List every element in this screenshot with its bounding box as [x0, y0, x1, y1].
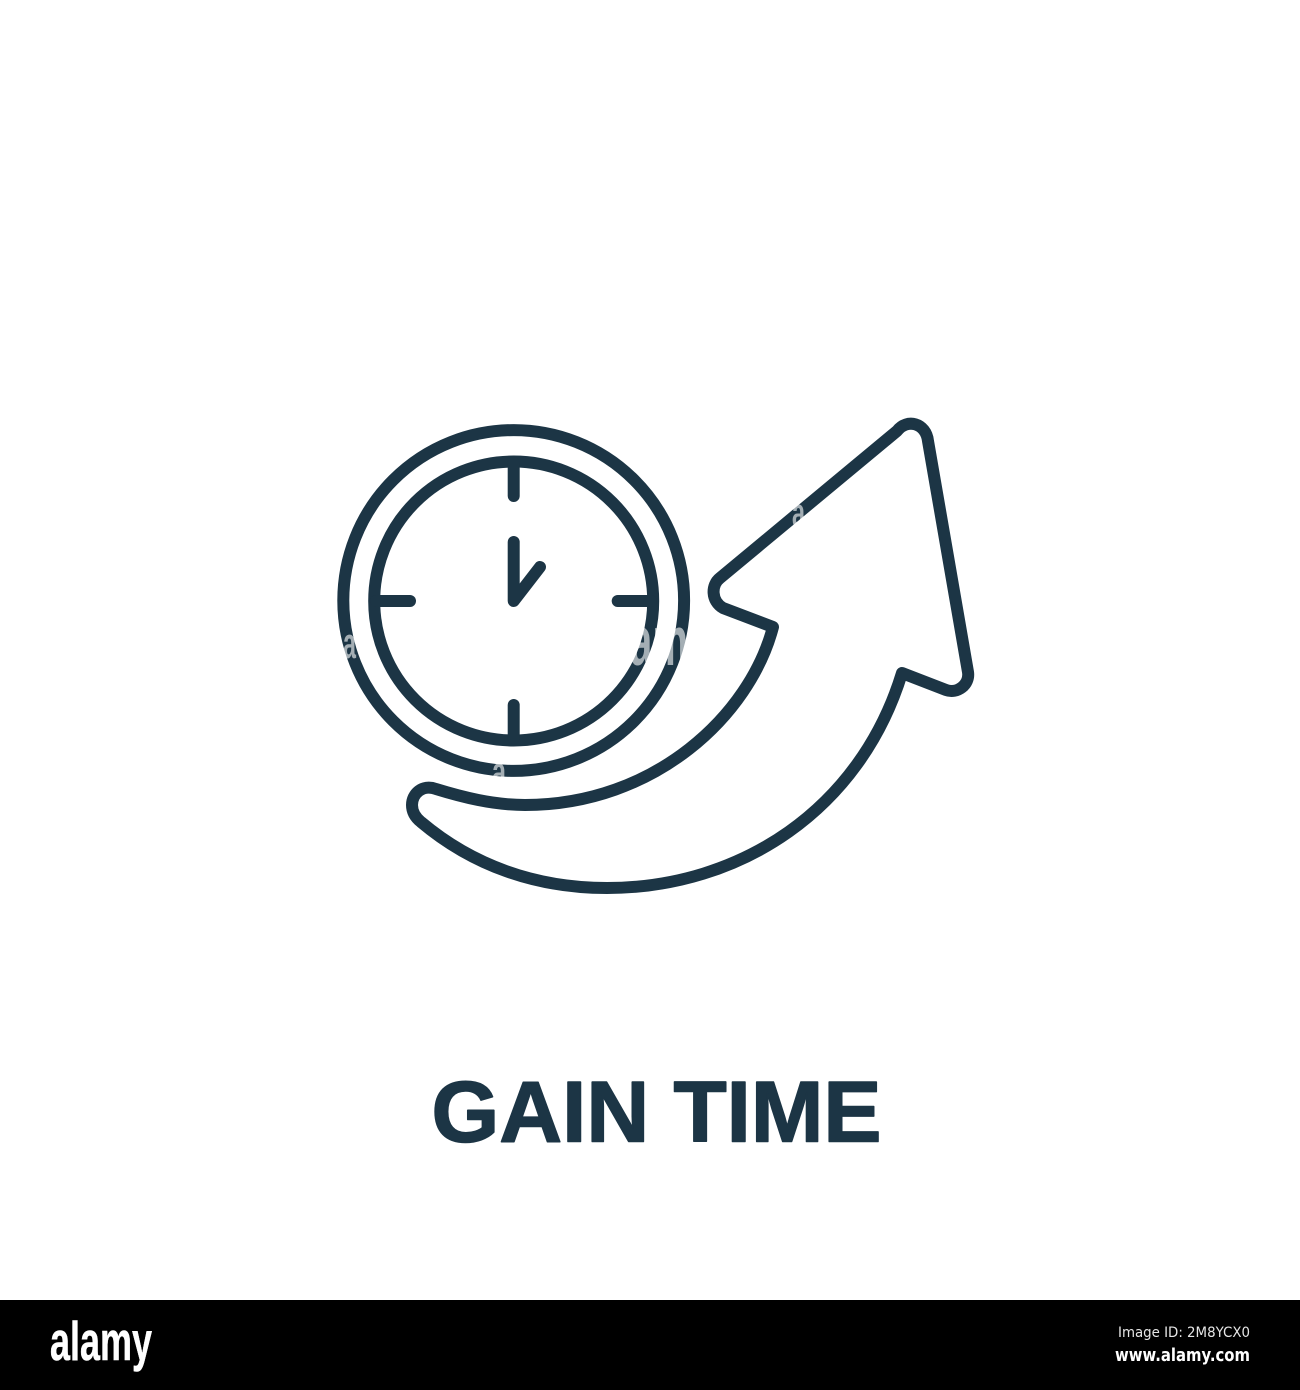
website: www.alamy.com — [1115, 1345, 1250, 1366]
image id: Image ID: 2M8YCX0 — [1118, 1325, 1250, 1341]
footer bar — [0, 1300, 1300, 1390]
icon: clock — [343, 430, 684, 771]
watermark fragments: a — [343, 619, 356, 668]
title: GAIN TIME — [432, 1064, 882, 1160]
footer logo: alamy — [50, 1310, 152, 1372]
watermark fragments: a — [792, 491, 805, 535]
watermark fragments — [343, 491, 805, 794]
watermark fragments: a — [492, 750, 506, 794]
watermark fragments: am — [630, 602, 688, 680]
icon: upward curved arrow — [412, 424, 968, 888]
